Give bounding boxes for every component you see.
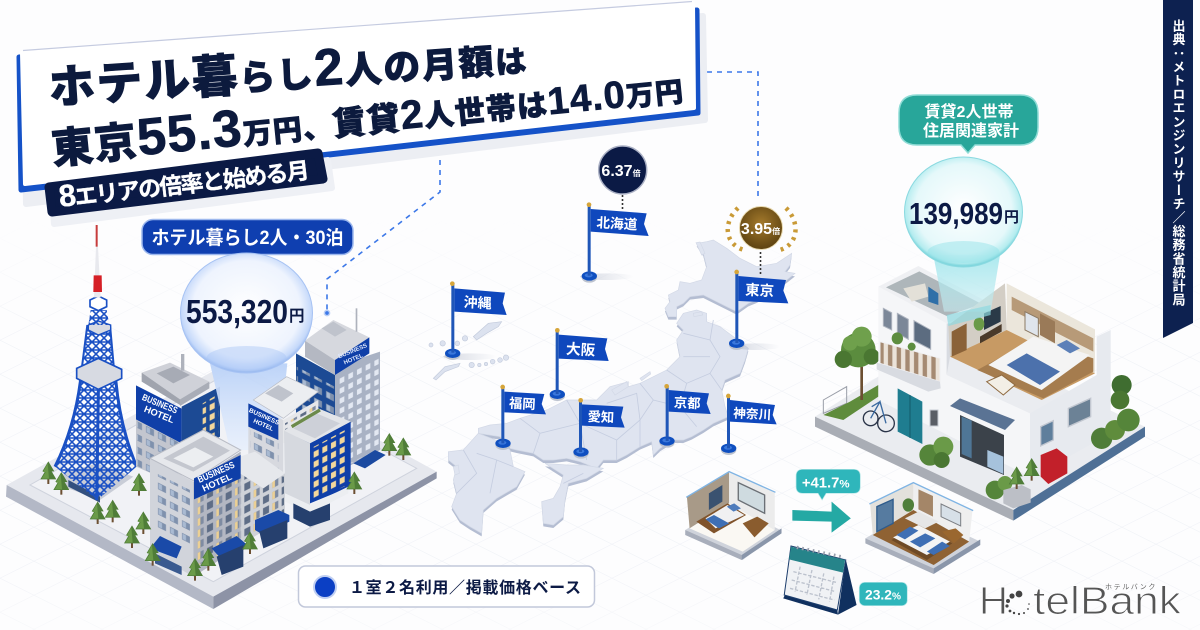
callout: ホテル暮らし2人・30泊: ホテル暮らし2人・30泊 — [152, 227, 344, 249]
flag: 大阪 — [550, 328, 609, 401]
building: center hotel: BUSINESS — [248, 407, 280, 427]
badge: 東京 3.95倍 with laurel: 3.95倍 — [741, 221, 780, 238]
building: tall back right hotel: BUSINESS — [338, 343, 368, 360]
panel: hotel city illustration — [6, 225, 437, 609]
flag: 愛知: 愛知 — [587, 408, 615, 425]
flag: 沖縄 — [443, 281, 507, 360]
flag: 沖縄: 沖縄 — [463, 294, 492, 311]
front windows — [883, 308, 1091, 446]
flag: 北海道: 北海道 — [596, 214, 638, 232]
room: small room before — [685, 472, 782, 560]
building: tall back right hotel: HOTEL — [343, 353, 364, 366]
panel: bottom rooms and change rates — [685, 469, 980, 615]
building: front right hotel — [284, 408, 351, 527]
white panel face — [22, 4, 694, 184]
red mailbox — [1041, 448, 1067, 484]
badge: +41.7%: +41.7% — [802, 475, 850, 491]
building: back left hotel: BUSINESS — [141, 392, 179, 416]
flag: 愛知 — [573, 398, 625, 459]
tree and fence — [823, 327, 880, 420]
legend: room basis — [298, 566, 594, 607]
flag: 北海道 — [580, 202, 649, 283]
badge: +41.7% — [796, 469, 860, 500]
transparent price beam — [210, 363, 287, 450]
badge: 北海道 6.37倍 — [599, 146, 647, 210]
shrubs — [919, 375, 1140, 508]
map extrusion — [448, 243, 795, 536]
logo: HotelBank — [979, 580, 1182, 623]
badge: 東京 3.95倍 with laurel — [728, 206, 796, 276]
badge: 北海道 6.37倍: 6.37倍 — [601, 163, 641, 180]
building: tall back right hotel — [296, 308, 380, 473]
room: large room after — [865, 483, 980, 574]
arrow: rent increase — [792, 502, 851, 533]
price bubble: 553,320円 — [180, 253, 312, 373]
connector: title to city — [327, 150, 440, 310]
side strip: source credit: 出典：メトロエンジンリサーチ／総務省統計局 — [1170, 19, 1186, 307]
balcony — [877, 332, 941, 392]
heading line 2: 東京55.3万円、賃貸2人世帯は14.0万円 — [48, 55, 685, 176]
flag: 大阪: 大阪 — [565, 340, 596, 359]
building: front main hotel: BUSINESS — [196, 460, 236, 485]
open bedroom — [948, 283, 1095, 400]
trees around the city — [40, 433, 411, 581]
callout: 賃貸2人世帯 住居関連家計: 住居関連家計 — [923, 121, 1019, 140]
japan map — [429, 240, 795, 536]
flag: 福岡 — [495, 385, 546, 450]
subtitle pill — [49, 150, 332, 224]
subtitle pill: 8エリアの倍率と始める月 — [57, 150, 311, 214]
prefecture borders — [457, 320, 722, 493]
connector end dot — [324, 310, 330, 316]
price bubble: 139,989円 — [904, 157, 1022, 267]
flag: 神奈川: 神奈川 — [733, 405, 772, 422]
building: front main hotel: HOTEL — [201, 471, 234, 494]
house platform — [815, 333, 1145, 521]
panel: rental house illustration — [815, 255, 1145, 521]
title panel — [19, 2, 705, 204]
price bubble: 139,989円: 139,989 — [909, 196, 1003, 231]
city platform — [6, 360, 437, 609]
meter box — [930, 410, 938, 426]
building: annex — [240, 452, 289, 548]
flag: 東京: 東京 — [745, 281, 774, 300]
flag: 福岡: 福岡 — [509, 396, 536, 412]
badge: 23.2% — [859, 582, 907, 606]
glass doors and awning — [950, 398, 1015, 475]
building: center hotel — [248, 377, 318, 477]
icon: tokyo tower — [55, 225, 137, 503]
panel shadow — [24, 16, 705, 204]
flag: 神奈川 — [721, 394, 777, 455]
building: back left hotel: HOTEL — [143, 404, 176, 425]
logo: HotelBank: ホテルバンク — [1105, 583, 1157, 591]
teal front door — [898, 388, 922, 444]
badge: 23.2%: 23.2% — [865, 587, 901, 602]
blue panel edge — [19, 10, 698, 190]
building: center hotel: HOTEL — [252, 418, 275, 433]
map landmass — [448, 240, 795, 533]
legend: room basis: １室２名利用／掲載価格ベース — [349, 578, 581, 597]
price bubble: 139,989円: 円 — [1004, 209, 1019, 226]
icon: desk calendar — [783, 546, 857, 615]
logo: HotelBank: H — [979, 580, 1008, 623]
panel top edge — [23, 2, 692, 50]
logo: HotelBank: telBank — [1033, 580, 1182, 623]
bicycle — [863, 402, 894, 432]
flag: 京都 — [659, 384, 711, 448]
price bubble: 553,320円: 円 — [289, 308, 305, 325]
flags on map — [443, 202, 788, 459]
callout: ホテル暮らし2人・30泊 — [142, 220, 353, 254]
flag: 東京 — [729, 270, 788, 350]
callout: 賃貸2人世帯 住居関連家計: 賃貸2人世帯 — [925, 102, 1013, 121]
building: front main hotel — [150, 430, 249, 577]
side strip: source credit — [1163, 0, 1193, 338]
building: back left hotel — [136, 354, 220, 487]
teal price beam — [933, 255, 1000, 312]
connector: title to Tokyo badge — [697, 72, 758, 197]
flag: 京都: 京都 — [674, 394, 701, 411]
okinawa islands — [429, 322, 509, 380]
house walls — [878, 266, 1111, 478]
heading line 1: ホテル暮らし2人の月額は — [47, 26, 528, 116]
callout: 賃貸2人世帯 住居関連家計 — [899, 95, 1038, 153]
price bubble: 553,320円: 553,320 — [186, 293, 288, 330]
building: awning back right — [353, 450, 386, 468]
background grid — [0, 283, 1200, 630]
